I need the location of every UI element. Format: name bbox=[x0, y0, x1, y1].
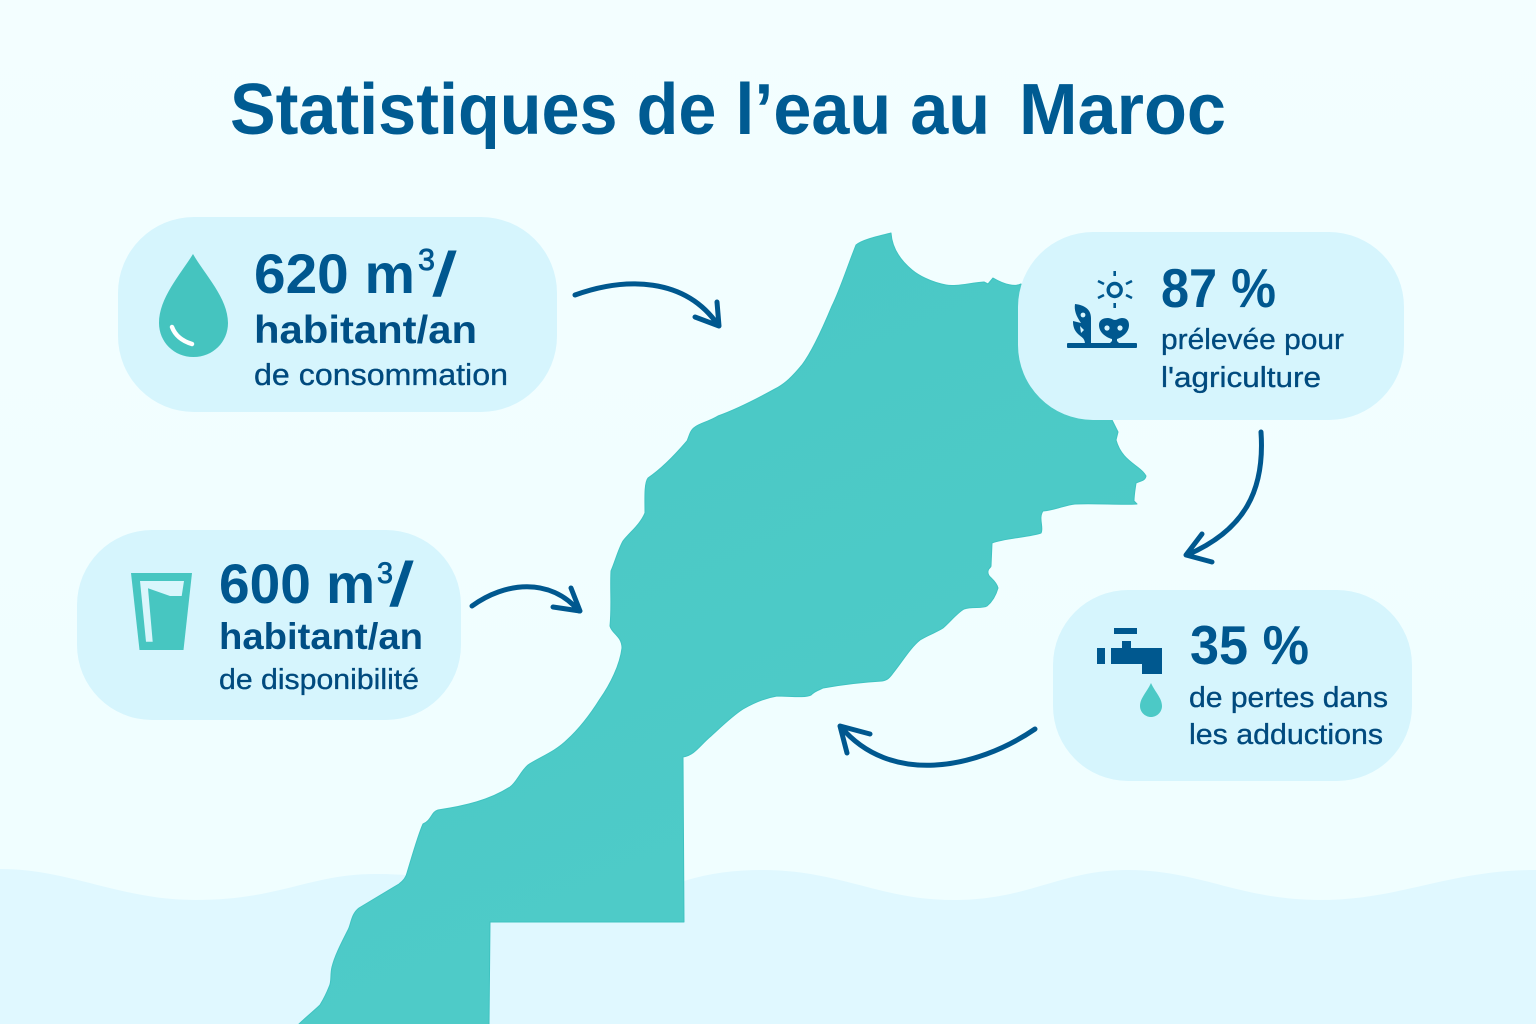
stat label: prélevée pour bbox=[1161, 324, 1344, 356]
icon: glass of water bbox=[131, 573, 192, 650]
stat label: de disponibilité bbox=[219, 664, 419, 696]
icon: sun and plants bbox=[1067, 271, 1137, 348]
panel: agriculture bbox=[1018, 232, 1404, 420]
map of Morocco bbox=[298, 233, 1146, 1024]
panel: pertes bbox=[1053, 590, 1412, 781]
stat label: de pertes dans bbox=[1189, 682, 1388, 714]
title: Maroc bbox=[1019, 70, 1226, 150]
panel background bbox=[1053, 590, 1412, 781]
panel: disponibilité bbox=[77, 530, 461, 720]
stat label: les adductions bbox=[1189, 719, 1383, 751]
arrow: pertes to map bbox=[840, 726, 1035, 765]
panel background bbox=[1018, 232, 1404, 420]
background wave bbox=[0, 869, 1536, 1024]
stat value: 87 % bbox=[1161, 257, 1276, 319]
stat unit: habitant/an bbox=[254, 309, 477, 352]
stat unit: habitant/an bbox=[219, 616, 423, 657]
stat value: 35 % bbox=[1190, 614, 1309, 676]
stat value: 3 bbox=[418, 242, 435, 277]
icon: dripping tap bbox=[1097, 628, 1162, 717]
stat value: / bbox=[434, 241, 455, 308]
arrow: consommation to map bbox=[575, 284, 719, 326]
stat label: de consommation bbox=[254, 357, 508, 392]
stat value: 600 m bbox=[219, 552, 375, 615]
stat value: 3 bbox=[377, 557, 393, 590]
stat label bbox=[1161, 324, 1344, 394]
icon: water drop bbox=[159, 254, 228, 357]
panel background bbox=[77, 530, 461, 720]
panel background bbox=[118, 217, 557, 412]
arrow: disponibilité to map bbox=[472, 587, 580, 611]
stat label: l'agriculture bbox=[1161, 362, 1321, 394]
arrow: agriculture to pertes bbox=[1186, 432, 1261, 562]
panel: consommation bbox=[118, 217, 557, 412]
stat value: / bbox=[391, 551, 412, 618]
title: Statistiques de l’eau au bbox=[230, 70, 990, 150]
stat value: 620 m bbox=[254, 242, 415, 305]
stat label bbox=[1189, 682, 1388, 751]
